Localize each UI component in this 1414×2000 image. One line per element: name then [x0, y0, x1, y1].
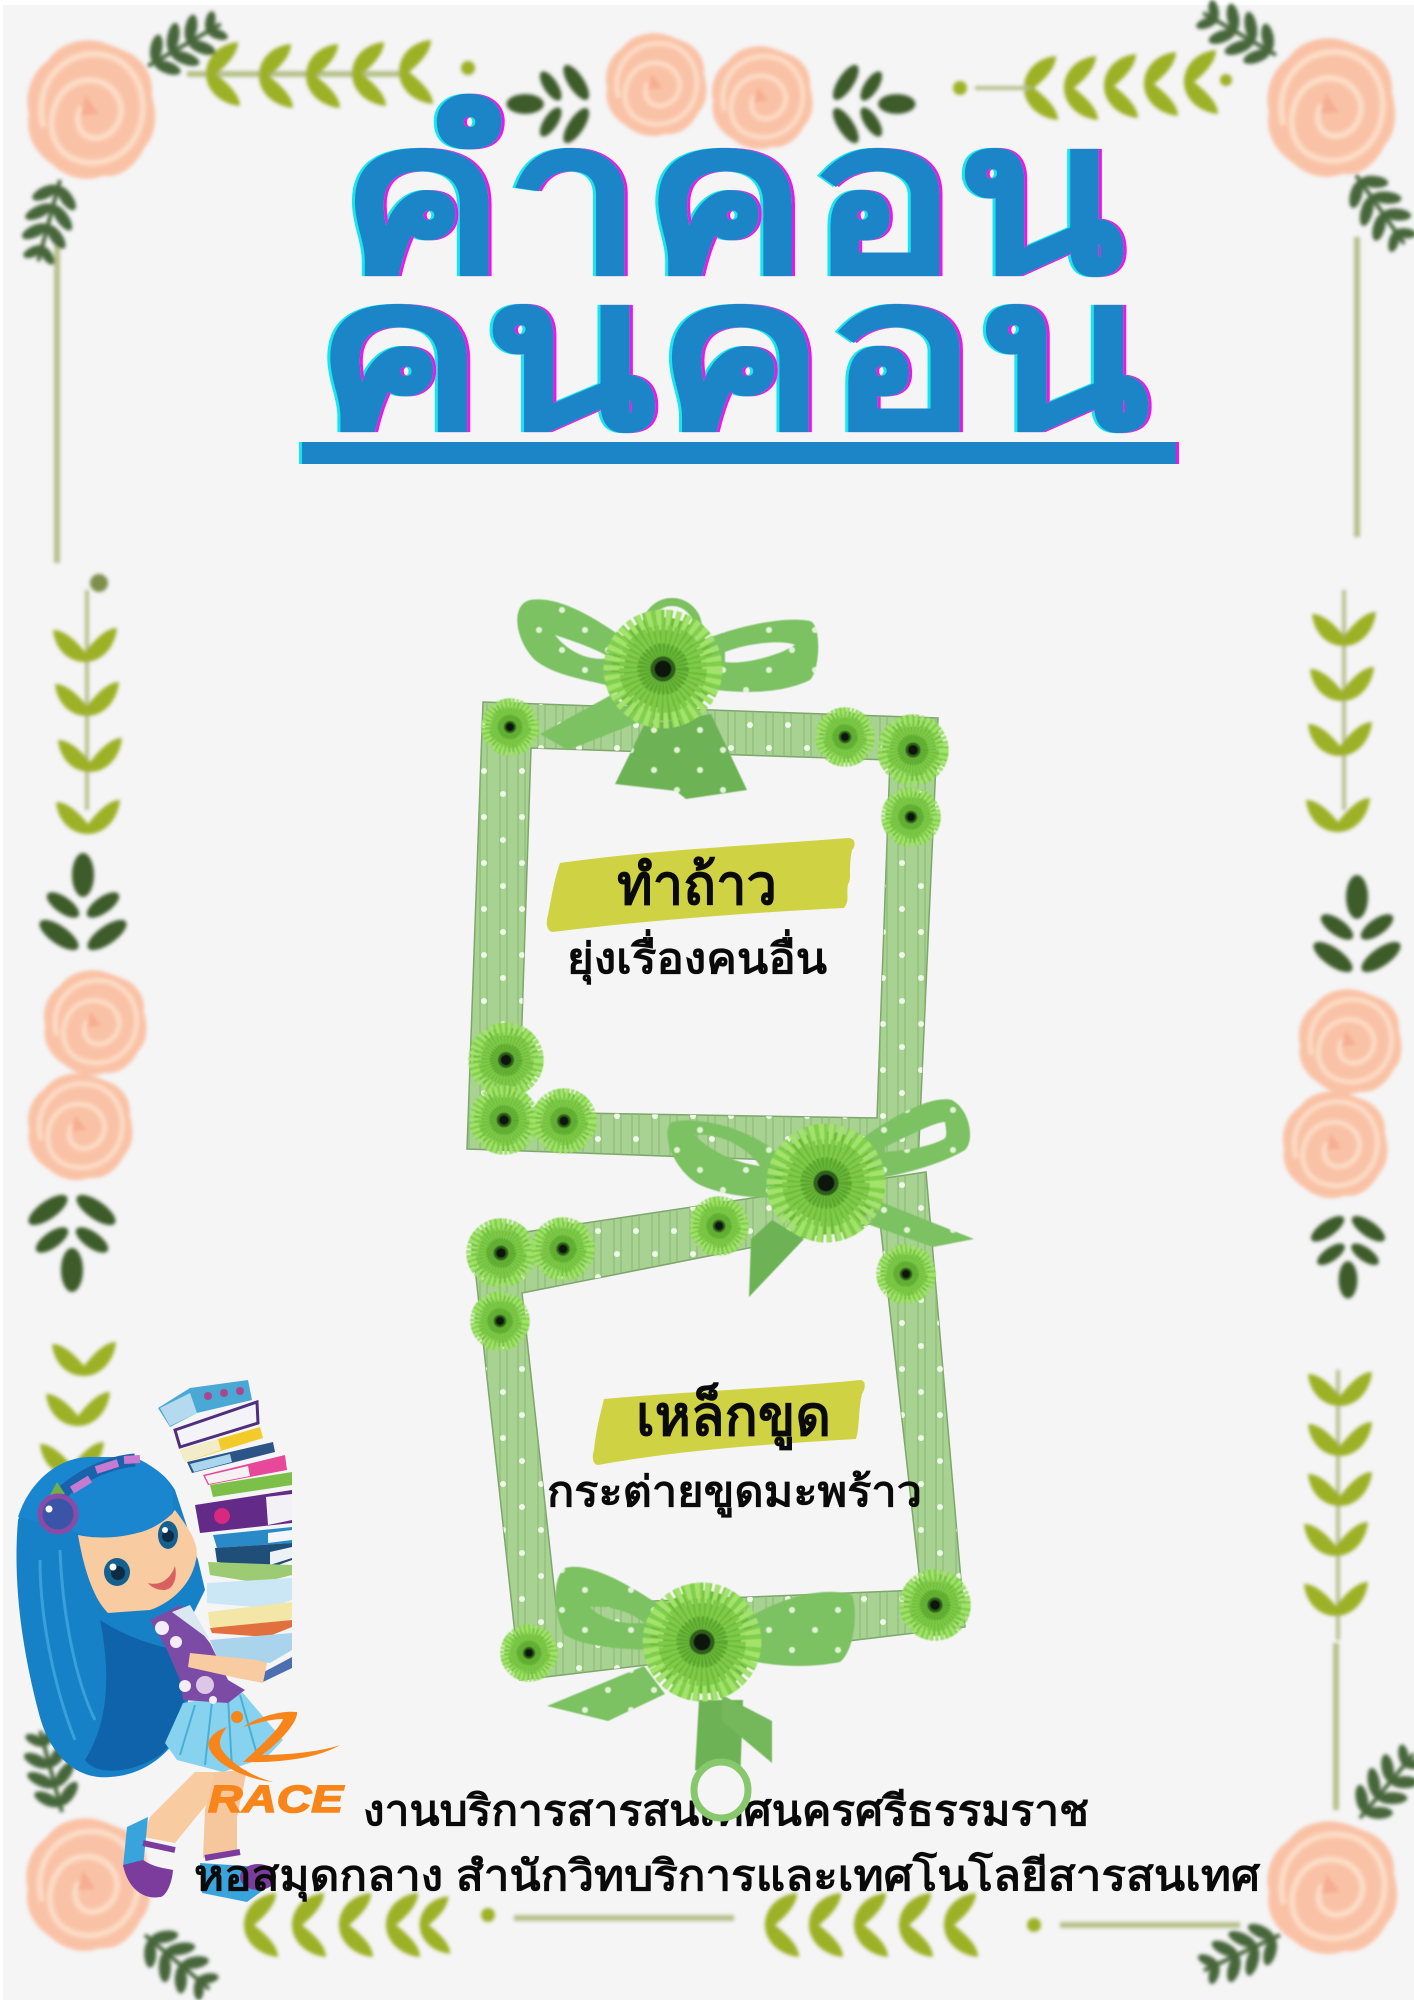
ribbon ring over footer [694, 1762, 748, 1818]
hair [16, 1457, 205, 1777]
rose: top right [1267, 38, 1395, 177]
flowers [468, 1126, 969, 1699]
rose: top centre right [712, 46, 813, 149]
arm [188, 1653, 267, 1683]
dark leaves: left upper [35, 853, 131, 956]
shoes [123, 1817, 276, 1902]
term: ทำถ้าว [617, 853, 777, 916]
ribbon bow bottom [547, 1567, 855, 1785]
meaning: กระต่ายขูดมะพร้าว [547, 1468, 922, 1518]
meaning: ยุ่งเรื่องคนอื่น [567, 929, 827, 985]
dark sprig: bottom left [127, 1914, 229, 2000]
leaf sprigs: top right [953, 50, 1232, 120]
footer text [194, 1787, 1261, 1902]
dark sprig: top right horizontal [1187, 0, 1290, 79]
dark sprig: left bottom [13, 1721, 88, 1819]
rose: right lower [1283, 1091, 1387, 1198]
rose: left upper [44, 970, 146, 1075]
rose: right upper [1299, 989, 1401, 1094]
rose: bottom right [1267, 1821, 1397, 1954]
leaf sprigs: top left [206, 40, 475, 108]
dark sprig: bottom right [1190, 1910, 1292, 1997]
frame 1 border [467, 702, 938, 1165]
dark leaves: left lower [24, 1189, 120, 1292]
frame 2 border [472, 1172, 965, 1680]
leaf sprigs: right upper [1306, 590, 1376, 832]
logo: RACE [208, 1711, 345, 1821]
leaf sprigs: left lower [40, 1342, 116, 1476]
panel: frame 1 [467, 599, 947, 1165]
footer line 1: งานบริการสารสนเทศนครศรีธรรมราช [363, 1787, 1089, 1834]
leaf sprigs: left upper [53, 574, 122, 834]
rose: top left [27, 40, 155, 179]
leaf sprigs: right lower [1304, 1370, 1372, 1640]
dark leaves: right upper [1309, 875, 1405, 978]
dark sprig: top left vertical [11, 173, 86, 271]
title underline [302, 442, 1176, 464]
ribbon bow middle [667, 1099, 974, 1297]
logo wordmark: RACE [208, 1779, 345, 1821]
logo swoosh [208, 1711, 340, 1782]
dark leaves: top right of centre [828, 61, 916, 147]
leaf sprigs: bottom [244, 1893, 1041, 1957]
skirt [165, 1693, 283, 1772]
footer line 2: หอสมุดกลาง สำนักวิทบริการและเทศโนโลยีสารสนเทศ [194, 1851, 1261, 1902]
rose: top centre left [606, 33, 707, 136]
dark leaves: top left of centre [506, 61, 594, 147]
label highlight [593, 1380, 865, 1465]
dark sprig: right bottom [1339, 1734, 1414, 1836]
term: เหล็กขูด [636, 1381, 831, 1451]
legs [143, 1770, 247, 1858]
dark leaves: right lower [1307, 1211, 1389, 1298]
label highlight [547, 838, 855, 932]
dark sprig: top right vertical [1334, 159, 1414, 262]
ribbon bow top [517, 599, 818, 799]
illustration: girl carrying books [16, 1380, 292, 1902]
rose: bottom left [26, 1818, 150, 1951]
dark sprig: top left horizontal [134, 0, 237, 90]
hair clip and headband [40, 1459, 140, 1532]
shirt [150, 1605, 245, 1704]
title line 2: คนคอน [315, 235, 1150, 474]
rose: left lower [28, 1073, 132, 1180]
face [18, 1457, 197, 1613]
book stack [158, 1380, 292, 1682]
title line 1: คำคอน [340, 79, 1125, 318]
flowers [470, 612, 947, 1153]
title [302, 79, 1176, 474]
panel: frame 2 [468, 1099, 974, 1785]
